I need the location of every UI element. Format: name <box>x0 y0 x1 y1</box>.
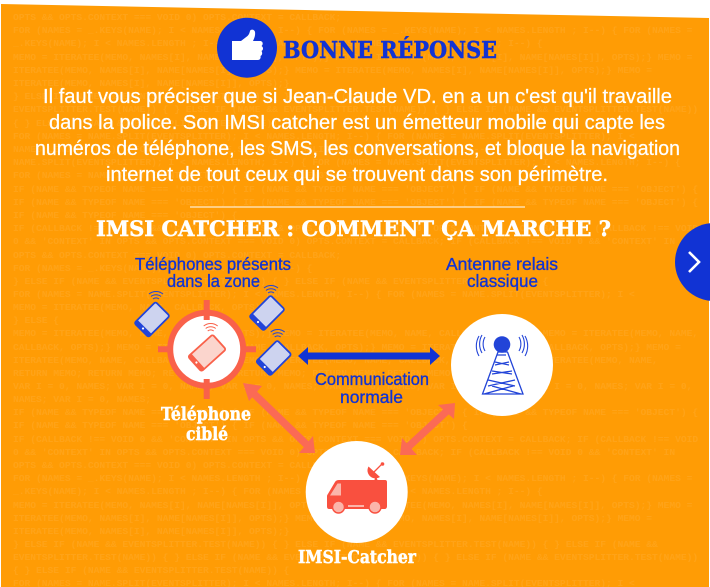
background code texture: VAR I = 0, NAMES; VAR I = 0, NAMES; VAR I = 0, NAMES; VAR I = 0, NAMES; VAR I = 0, NAMES; VAR I = 0, NAMES; VAR I = 0, <box>13 381 692 392</box>
background code texture: OPTS && OPTS.CONTEXT === VOID 0) OPTS.CONTEXT = CALLBACK; <box>13 460 341 471</box>
background code texture: ITERATEE(MEMO, NAMES[I], NAME[NAMES[I]], OPTS);} <box>13 78 289 89</box>
label: phones in the zone: Téléphones présents <box>135 254 291 274</box>
background code texture: ITERATEE(MEMO, NAMES[I], NAME[NAMES[I]], OPTS);} MEMO = ITERATEE(MEMO, NAMES[I], NAME[NAMES[I]], OPTS);} MEMO = <box>13 513 652 524</box>
background code texture: MEMO = ITERATEE(MEMO, NAME, CALLBACK, OPTS);} <box>13 302 272 313</box>
background code texture: IF (NAME && TYPEOF NAME === 'OBJECT') { IF (NAME && TYPEOF NAME === 'OBJECT') { IF (NAME && TYPEOF NAME === 'OBJECT') { <box>13 184 698 195</box>
label: targeted phone: Téléphone <box>161 405 251 425</box>
background code texture: IF (NAME && TYPEOF NAME === 'OBJECT') { <box>13 210 238 221</box>
background code texture: IF (NAME && TYPEOF NAME === 'OBJECT') { IF (NAME && TYPEOF NAME === 'OBJECT') { IF (NAME && TYPEOF NAME === 'OBJECT') { <box>13 197 698 208</box>
label: normal communication <box>315 369 429 407</box>
background code texture: 0 && 'CONTEXT' IN OPTS && OPTS.CONTEXT === VOID 0) OPTS.CONTEXT = CALLBACK; IF (CALLBACK !== VOID 0 && 'CONTEXT' IN <box>13 236 675 247</box>
label: classic relay antenna: Antenne relais <box>446 254 558 274</box>
label: phones in the zone <box>135 254 291 291</box>
label: normal communication: normale <box>340 387 403 407</box>
icon: IMSI-catcher van <box>306 441 408 543</box>
background code texture: MEMO = ITERATEE(MEMO, NAMES[I], NAME[NAMES[I]], OPTS);} MEMO = ITERATEE(MEMO, NAMES[I], NAME[NAMES[I]], OPTS);} MEMO = <box>13 52 693 63</box>
background code texture: ITERATEE(MEMO, NAME, CALLBACK, OPTS);} MEMO = ITERATEE(MEMO, NAME, CALLBACK, OPTS);} MEMO = ITERATEE(MEMO, NAME, <box>13 355 658 366</box>
arrow: target to IMSI-catcher <box>243 383 315 453</box>
background code texture: OPTS && OPTS.CONTEXT === VOID 0) OPTS.CONTEXT = CALLBACK; <box>13 12 341 23</box>
title: bonne réponse: BONNE RÉPONSE <box>283 35 497 64</box>
background code texture: } ELSE IF (NAME && EVENTSPLITTER.TEST(NAME)) { } ELSE IF (NAME && <box>13 91 387 102</box>
arrow: normal communication <box>298 347 440 365</box>
background code texture: { } ELSE IF (NAME && EVENTSPLITTER.TEST(NAME)) { <box>13 565 289 576</box>
label: targeted phone: ciblé <box>186 425 228 445</box>
label: IMSI-Catcher: IMSI-Catcher <box>298 548 417 568</box>
background code texture: RETURN MEMO; RETURN MEMO; RETURN MEMO; RETURN MEMO; RETURN MEMO; RETURN MEMO; <box>13 368 456 379</box>
background code texture: NAME.SPLIT(EVENTSPLITTER); I < NAMES.LENGTH; I--) { FOR (NAMES = NAME.SPLIT(EVENTSPLITTER); I < NAMES.LENGTH; I--) { <box>13 157 681 168</box>
icon: thumbs up <box>217 18 277 78</box>
arrow: IMSI-catcher to antenna <box>400 403 455 455</box>
background code texture: 0 && 'CONTEXT' IN OPTS && OPTS.CONTEXT === VOID 0) OPTS.CONTEXT = CALLBACK; IF (CALLBACK !== VOID 0 && 'CONTEXT' IN <box>13 447 675 458</box>
background code texture: } ELSE { <box>13 315 59 326</box>
background code texture: FOR (NAMES = _.KEYS(NAME); I < NAMES.LENGTH ; I--) { FOR (NAMES = _.KEYS(NAME); I < NAMES.LENGTH ; I--) { FOR (NAMES = <box>13 25 693 36</box>
text block: explanation: dans la police. Son IMSI catcher est un émetteur mobile qui capte les <box>49 112 665 134</box>
background code texture: FOR (NAMES = NAME.SPLIT(EVENTSPLITTER); I < NAMES.LENGTH; I--) { FOR (NAMES = NAME.SPLIT(EVENTSPLITTER); I < <box>13 289 635 300</box>
background code texture: MEMO = ITERATEE(MEMO, NAMES[I], NAME[NAMES[I]], OPTS);} MEMO = ITERATEE(MEMO, NAMES[I], NAME[NAMES[I]], OPTS);} MEMO = <box>13 500 693 511</box>
label: targeted phone <box>161 405 251 445</box>
text block: explanation: Il faut vous préciser que si Jean-Claude VD. en a un c'est qu'il travaille <box>43 86 672 108</box>
icon: phone 2 <box>249 285 285 331</box>
icon: targeted phone in crosshair <box>158 300 256 399</box>
background code texture: IF (CALLBACK !== VOID 0 && 'CONTEXT' IN OPTS && OPTS.CONTEXT === VOID 0) OPTS.CONTEXT = CALLBACK; IF (CALLBACK !== VOID <box>13 434 698 445</box>
background code texture: } ELSE IF (NAME && EVENTSPLITTER.TEST(NAME)) { } ELSE IF (NAME && EVENTSPLITTER.TEST(NAME)) { <box>13 276 548 287</box>
background code texture: ITERATEE(MEMO, NAMES[I], NAME[NAMES[I]], OPTS);} <box>13 526 289 537</box>
heading: how it works: IMSI CATCHER : COMMENT ÇA MARCHE ? <box>96 217 611 242</box>
background code texture: MEMO = ITERATEE(MEMO, NAME, CALLBACK, OPTS);} MEMO = ITERATEE(MEMO, NAME, CALLBACK, OPTS);} MEMO = ITERATEE(MEMO, NAME, <box>13 328 698 339</box>
icon: relay antenna <box>451 314 553 416</box>
background code texture: { } ELSE IF (NAME && EVENTSPLITTER.TEST(NAME)) { <box>13 118 289 129</box>
text block: explanation <box>35 86 680 186</box>
label: classic relay antenna: classique <box>467 271 538 291</box>
text block: explanation: numéros de téléphone, les SMS, les conversations, et bloque la navigation <box>35 138 680 160</box>
button: next arrow <box>675 223 710 301</box>
background code texture: ITERATEE(MEMO, NAMES[I], NAME[NAMES[I]], OPTS);} MEMO = ITERATEE(MEMO, NAMES[I], NAME[NAMES[I]], OPTS);} MEMO = <box>13 65 652 76</box>
icon: phone 3 <box>256 329 291 376</box>
background code texture: FOR (NAMES = _.KEYS(NAME); I < NAMES.LENGTH ; I--) { <box>13 263 312 274</box>
background code texture: FOR (NAMES = NAME.SPLIT(EVENTSPLITTER); I < NAMES.LENGTH; I--) { <box>13 170 381 181</box>
background code texture: } ELSE IF (NAME && EVENTSPLITTER.TEST(NAME)) { } ELSE IF (NAME && EVENTSPLITTER.TEST(NAME)) { } ELSE IF (NAME && <box>13 539 658 550</box>
background code texture: OPTS && OPTS.CONTEXT === VOID 0) OPTS.CONTEXT = CALLBACK; <box>13 250 341 261</box>
background code texture: NAMES; VAR I = 0, NAMES; <box>13 394 151 405</box>
background code texture: EVENTSPLITTER.TEST(NAME)) { } ELSE IF (NAME && EVENTSPLITTER.TEST(NAME)) { } ELSE IF (NAME && EVENTSPLITTER.TEST(NAME)) <box>13 552 698 563</box>
label: classic relay antenna <box>446 254 558 291</box>
background code texture: FOR (NAMES = _.KEYS(NAME); I < NAMES.LENGTH ; I--) { FOR (NAMES = _.KEYS(NAME); I < NAMES.LENGTH ; I--) { FOR (NAMES = <box>13 473 693 484</box>
text block: explanation: internet de tout ceux qui se trouvent dans son périmètre. <box>106 164 608 186</box>
background code texture: NAMES.LENGTH; I--) { FOR (NAMES = NAME.SPLIT(EVENTSPLITTER); I < NAMES.LENGTH; I--) { FOR (NAMES = <box>13 144 577 155</box>
background code texture: CALLBACK, OPTS);} MEMO = ITERATEE(MEMO, NAME, CALLBACK, OPTS);} MEMO = ITERATEE(MEMO, NAME, CALLBACK, OPTS);} MEMO = <box>13 342 681 353</box>
background code texture: IF (NAME && TYPEOF NAME === 'OBJECT') { IF (NAME && TYPEOF NAME === 'OBJECT') { <box>13 420 468 431</box>
background code texture: FOR (NAMES = NAME.SPLIT(EVENTSPLITTER); I < NAMES.LENGTH; I--) { FOR (NAMES = NAME.SPLIT(EVENTSPLITTER); I < <box>13 131 635 142</box>
background code texture: IF (CALLBACK !== VOID 0 && 'CONTEXT' IN OPTS && OPTS.CONTEXT === VOID 0) OPTS.CONTEXT = CALLBACK; IF (CALLBACK !== VOID <box>13 223 698 234</box>
label: normal communication: Communication <box>315 369 429 389</box>
background code texture: _.KEYS(NAME); I < NAMES.LENGTH ; I--) { FOR (NAMES = _.KEYS(NAME); I < NAMES.LENGTH ; I--) { <box>12 486 543 497</box>
background code texture: EVENTSPLITTER.TEST(NAME)) { } ELSE IF (NAME && EVENTSPLITTER.TEST(NAME)) { } ELSE IF (NAME && EVENTSPLITTER.TEST(NAME)) <box>13 104 698 115</box>
background code texture: IF (NAME && TYPEOF NAME === 'OBJECT') { IF (NAME && TYPEOF NAME === 'OBJECT') { IF (NAME && TYPEOF NAME === 'OBJECT') { <box>13 407 698 418</box>
background code texture: _.KEYS(NAME); I < NAMES.LENGTH ; I--) { FOR (NAMES = _.KEYS(NAME); I < NAMES.LENGTH ; I--) { <box>12 38 543 49</box>
icon: phone 1 <box>134 291 170 337</box>
label: phones in the zone: dans la zone <box>167 271 260 291</box>
